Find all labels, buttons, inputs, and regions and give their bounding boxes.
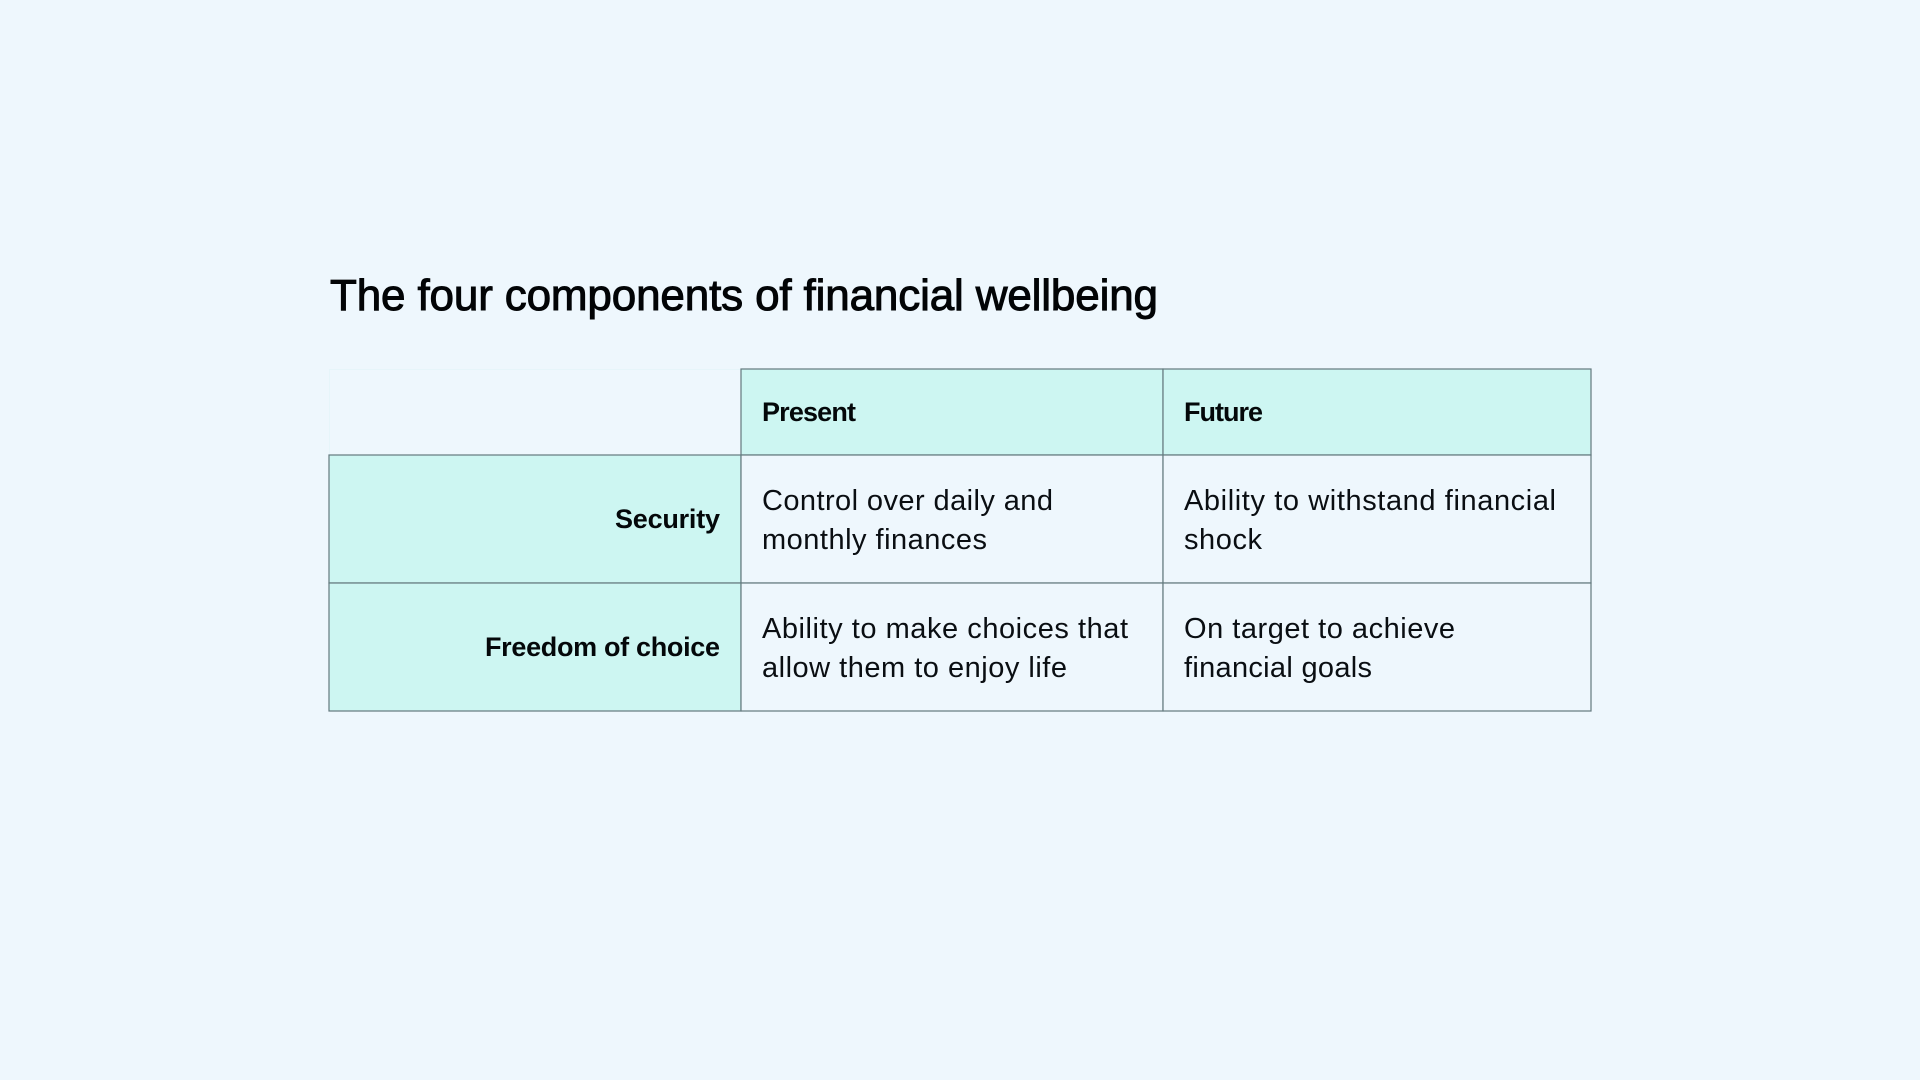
row header: Security: Security	[615, 504, 720, 534]
cell: security future	[1163, 455, 1591, 583]
cell: freedom future: On target to achieve	[1184, 613, 1455, 645]
cell: freedom present: Ability to make choices that	[762, 613, 1128, 645]
cell: freedom future: financial goals	[1184, 652, 1372, 684]
empty corner cell	[330, 370, 741, 455]
cell: security future: Ability to withstand financial	[1184, 485, 1556, 517]
row header: Freedom of choice: Freedom of choice	[485, 632, 720, 662]
cell: freedom present: allow them to enjoy life	[762, 652, 1067, 684]
cell: security present: monthly finances	[762, 524, 987, 556]
cell: security present: Control over daily and	[762, 485, 1053, 517]
title: The four components of financial wellbeing	[330, 271, 1158, 320]
row header: Freedom of choice	[329, 583, 741, 711]
header cell: Future	[1163, 369, 1591, 455]
cell: freedom present	[741, 583, 1163, 711]
cell: freedom future	[1163, 583, 1591, 711]
cell: security present	[741, 455, 1163, 583]
header cell: Present: Present	[762, 397, 856, 427]
cell: security future: shock	[1184, 524, 1262, 556]
header cell: Future: Future	[1184, 397, 1263, 427]
table	[329, 369, 1591, 711]
header cell: Present	[741, 369, 1163, 455]
row header: Security	[329, 455, 741, 583]
